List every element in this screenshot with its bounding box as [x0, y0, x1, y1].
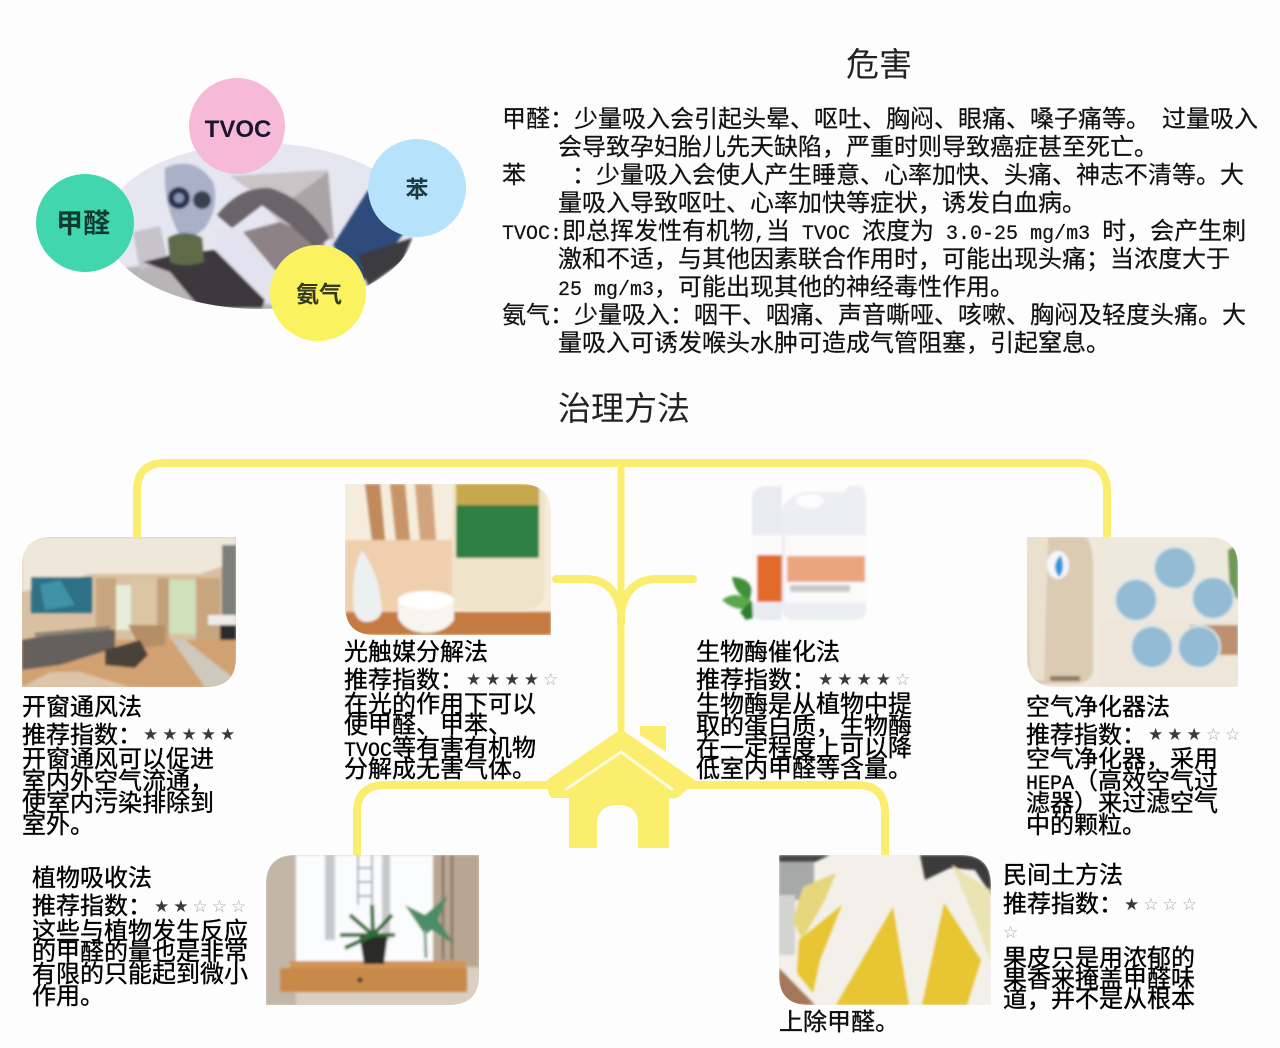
panel: 生物酶催化法: 生物酶催化法 — [696, 632, 840, 667]
photo: air purifier — [1027, 537, 1238, 687]
panel: 开窗通风法: 室内外空气流通， — [22, 761, 214, 796]
panel: 生物酶催化法: 取的蛋白质，生物酶 — [696, 706, 912, 741]
text block: hazards: 氨气：少量吸入：咽干、咽痛、声音嘶哑、咳嗽、胸闷及轻度头痛。大 — [502, 295, 1246, 330]
panel: 民间土方法: 民间土方法 — [1003, 855, 1123, 890]
text block: hazards: 量吸入导致呕吐、心率加快等症状，诱发白血病。 — [558, 183, 1086, 218]
circle: TVOC — [189, 78, 285, 174]
panel: 生物酶催化法: 生物酶是从植物中提 — [696, 684, 912, 719]
panel: 植物吸收法: 作用。 — [32, 976, 104, 1011]
heading: 危害: 危害 — [846, 38, 912, 86]
photo: person wearing gas mask on sofa — [118, 144, 414, 309]
panel: 空气净化器法: ★★★☆☆ — [1148, 725, 1244, 745]
panel: 光触媒分解法: 光触媒分解法 — [344, 632, 488, 667]
text block: hazards: 量吸入可诱发喉头水肿可造成气管阻塞，引起窒息。 — [558, 323, 1110, 358]
panel: 生物酶催化法: 低室内甲醛等含量。 — [696, 749, 912, 784]
circle: 氨气 — [270, 245, 366, 341]
photo: plants on window sill — [266, 855, 479, 1005]
photo: pomelo peel — [779, 855, 991, 1005]
panel: 植物吸收法 — [32, 858, 250, 1011]
panel: 空气净化器法 — [1026, 687, 1244, 840]
panel: 植物吸收法: ★★☆☆☆ — [154, 897, 250, 917]
text block: hazards: 苯 — [502, 155, 526, 190]
panel: 植物吸收法: 这些与植物发生反应 — [32, 911, 248, 946]
panel: 开窗通风法: 推荐指数： — [22, 715, 142, 750]
panel: 民间土方法: 道，并不是从根本 — [1003, 979, 1195, 1014]
panel: 光触媒分解法: 使甲醛、甲苯、 — [344, 705, 512, 740]
panel: 光触媒分解法: ★★★★☆ — [466, 670, 562, 690]
panel: 生物酶催化法: ★★★★☆ — [818, 670, 914, 690]
text block: hazards: 25 mg/m3，可能出现其他的神经毒性作用。 — [558, 267, 1014, 302]
circle: TVOC: TVOC — [205, 116, 271, 143]
text block: hazards — [502, 99, 1258, 358]
panel: 开窗通风法: 开窗通风法 — [22, 687, 142, 722]
circle: 苯: 苯 — [406, 176, 428, 202]
text block: hazards: 激和不适，与其他因素联合作用时，可能出现头痛；当浓度大于 — [558, 239, 1230, 274]
panel: 光触媒分解法: 推荐指数： — [344, 660, 464, 695]
text block: hazards: TVOC:即总挥发性有机物,当 TVOC 浓度为 3.0-25 mg/m3 时，会产生刺 — [502, 211, 1246, 246]
panel: 植物吸收法: 的甲醛的量也是非常 — [32, 932, 248, 967]
panel: 空气净化器法: 中的颗粒。 — [1026, 805, 1146, 840]
connector lines: top branch — [137, 463, 1107, 735]
connector lines: bottom branch — [357, 785, 885, 856]
panel: 开窗通风法: 室外。 — [22, 805, 94, 840]
panel: 生物酶催化法: 推荐指数： — [696, 660, 816, 695]
panel: 空气净化器法: 滤器）来过滤空气 — [1026, 783, 1218, 818]
panel: 光触媒分解法: TVOC等有害有机物 — [344, 728, 536, 763]
heading: 治理方法: 治理方法 — [558, 382, 690, 430]
text block: hazards: 甲醛：少量吸入会引起头晕、呕吐、胸闷、眼痛、嗓子痛等。 过量吸入 — [502, 99, 1258, 134]
photo: photocatalyst bottle — [345, 484, 551, 635]
panel: 空气净化器法: HEPA（高效空气过 — [1026, 761, 1218, 796]
text: 民间土方法 continuation: 上除甲醛。 — [779, 1002, 899, 1037]
panel: 植物吸收法: 推荐指数： — [32, 886, 152, 921]
panel: 民间土方法: 果香来掩盖甲醛味 — [1003, 959, 1195, 994]
circle: 苯 — [368, 139, 466, 237]
panel: 民间土方法: 果皮只是用浓郁的 — [1003, 938, 1195, 973]
panel: 开窗通风法: 开窗通风可以促进 — [22, 739, 214, 774]
panel: 光触媒分解法: 在光的作用下可以 — [344, 684, 536, 719]
panel: 开窗通风法: 使室内污染排除到 — [22, 783, 214, 818]
circle: 氨气: 氨气 — [296, 281, 342, 307]
circle: 甲醛: 甲醛 — [56, 209, 110, 239]
panel: 植物吸收法: 有限的只能起到微小 — [32, 954, 248, 989]
panel: 光触媒分解法 — [344, 632, 562, 784]
text block: hazards: 会导致孕妇胎儿先天缺陷，严重时则导致癌症甚至死亡。 — [558, 127, 1158, 162]
panel: 光触媒分解法: 分解成无害气体。 — [344, 749, 536, 784]
panel: 空气净化器法: 推荐指数： — [1026, 715, 1146, 750]
panel: 民间土方法 — [1003, 855, 1201, 1014]
panel: 生物酶催化法 — [696, 632, 914, 784]
panel: 民间土方法: ☆ — [1003, 923, 1022, 943]
panel: 开窗通风法 — [22, 687, 239, 840]
panel: 空气净化器法: 空气净化器法 — [1026, 687, 1170, 722]
panel: 民间土方法: ★☆☆☆ — [1124, 895, 1201, 915]
panel: 开窗通风法: ★★★★★ — [143, 725, 239, 745]
panel: 空气净化器法: 空气净化器，采用 — [1026, 739, 1218, 774]
panel: 生物酶催化法: 在一定程度上可以降 — [696, 728, 912, 763]
panel: 植物吸收法: 植物吸收法 — [32, 858, 152, 893]
photo: bio-enzyme bottles — [722, 486, 866, 620]
circle: 甲醛 — [36, 174, 134, 272]
panel: 民间土方法: 推荐指数： — [1003, 884, 1123, 919]
icon: house — [547, 726, 696, 848]
text block: hazards: ：少量吸入会使人产生睡意、心率加快、头痛、神志不清等。大 — [572, 155, 1244, 190]
photo: living room — [22, 537, 236, 687]
